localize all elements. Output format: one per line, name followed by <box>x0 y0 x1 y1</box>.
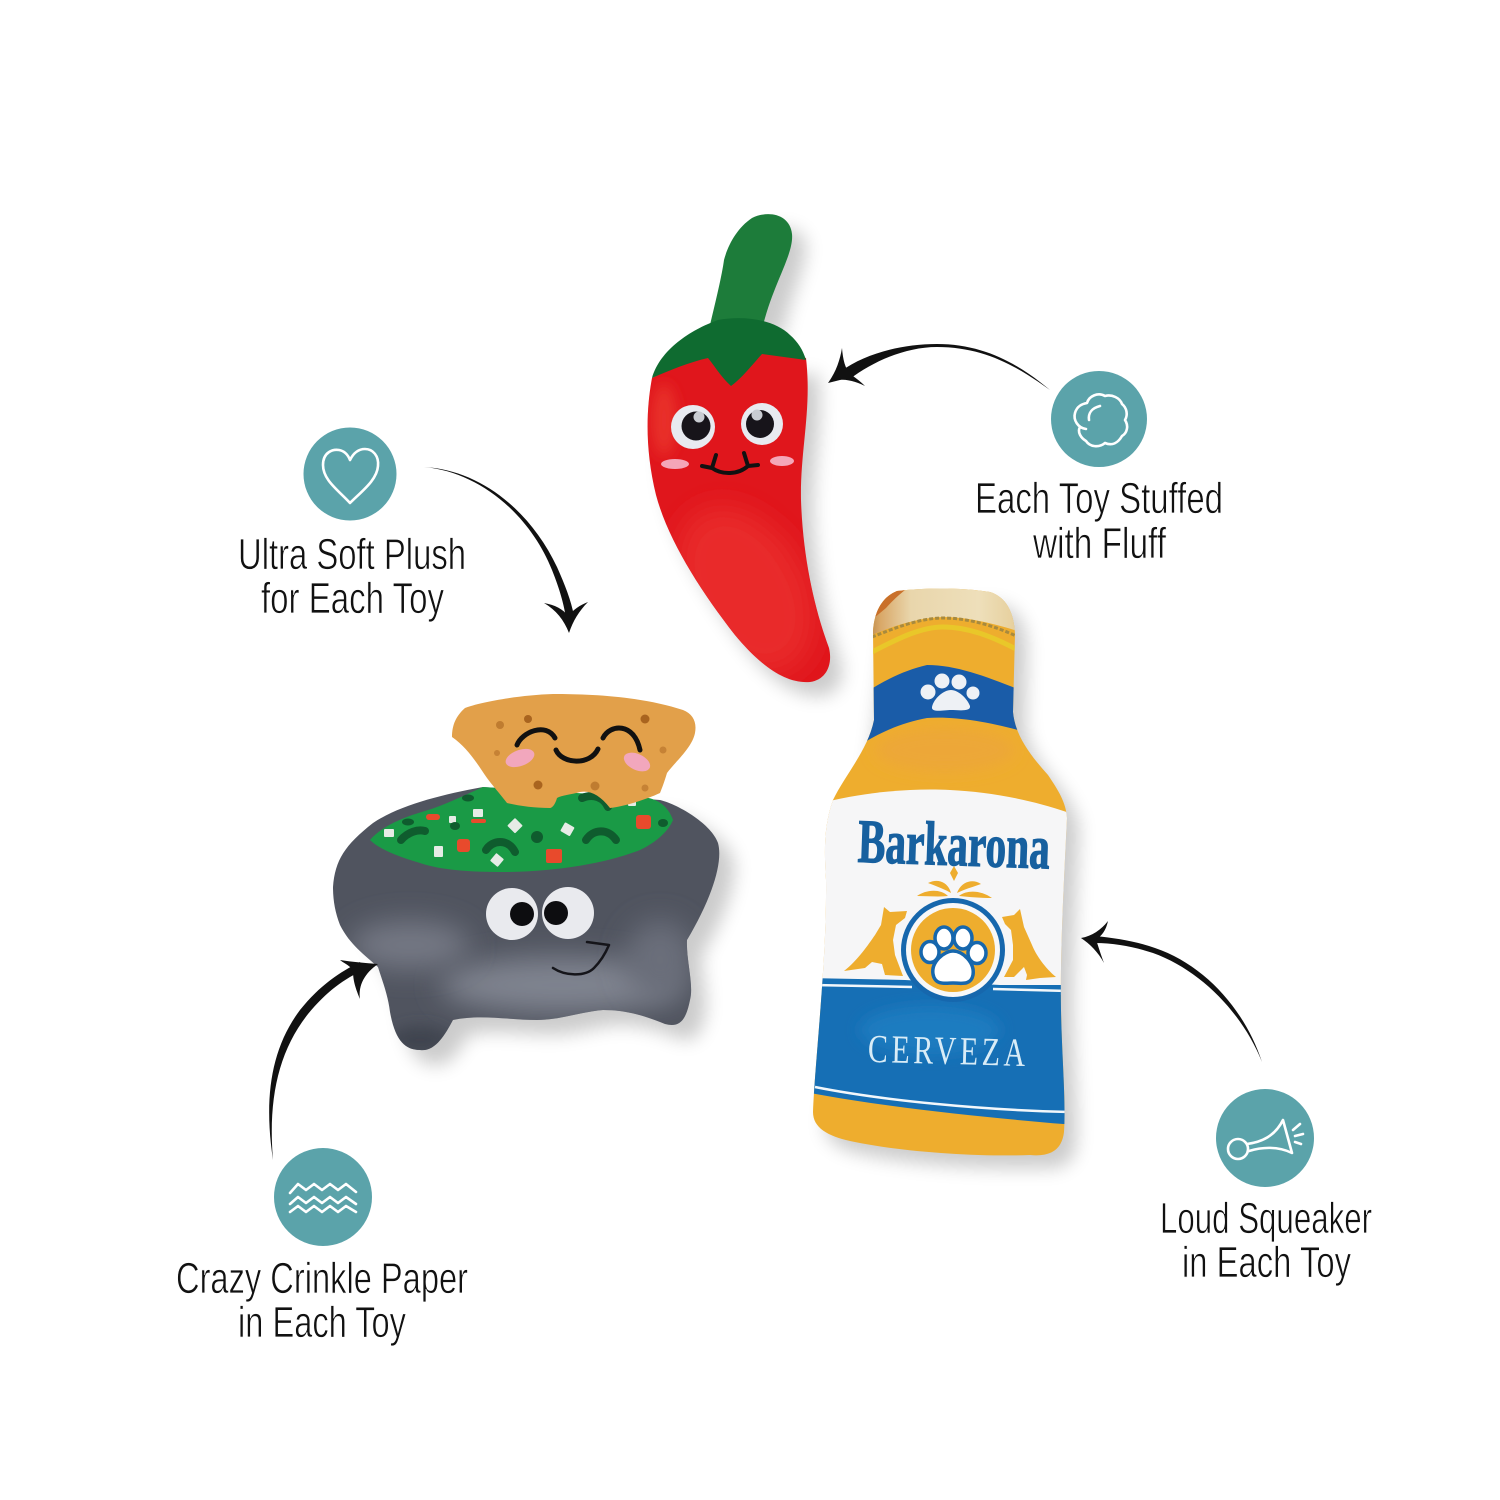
bottle gold cap <box>873 588 1014 634</box>
callout: ultra soft plush <box>238 428 466 623</box>
arrow: plush to guacamole <box>424 467 588 633</box>
chili right eye <box>741 403 783 445</box>
left dog silhouette <box>844 907 907 976</box>
chip specks <box>494 714 666 792</box>
icon: squeaker horn <box>1216 1089 1314 1187</box>
sun fan ornament <box>917 866 992 898</box>
chili smile <box>702 453 758 473</box>
chili body <box>648 354 830 682</box>
chip smile <box>556 749 598 761</box>
chili left eye <box>671 405 715 449</box>
chip right eye arc <box>603 728 640 750</box>
icon: crinkle waves <box>274 1148 372 1246</box>
label: squeaker <box>1160 1194 1372 1287</box>
arrow: fluff to chili <box>828 344 1050 390</box>
infographic canvas <box>178 214 1372 1346</box>
chili blushes <box>661 456 794 469</box>
chip left eye arc <box>517 730 555 745</box>
icon: heart <box>304 428 396 520</box>
bottle lower blue panel <box>810 978 1075 1125</box>
medallion paw <box>921 927 986 983</box>
arrow: crinkle to bowl <box>269 960 378 1160</box>
label: fluff <box>975 474 1223 568</box>
label: crinkle: Crazy Crinkle Paper <box>176 1254 468 1303</box>
label: plush: Ultra Soft Plush <box>238 530 466 579</box>
label: squeaker: Loud Squeaker <box>1160 1194 1372 1243</box>
bottle neck blue band <box>865 665 1025 742</box>
label: crinkle <box>176 1254 468 1347</box>
label: fluff: with Fluff <box>1032 519 1167 568</box>
brand name Barkarona: Barkarona <box>857 808 1051 882</box>
guacamole <box>370 787 673 872</box>
bowl right eye <box>542 887 594 939</box>
label: fluff: Each Toy Stuffed <box>975 474 1223 523</box>
toy: beer bottle <box>800 580 1080 1170</box>
medallion <box>901 898 1005 1002</box>
bowl left eye <box>486 888 538 940</box>
CERVEZA text: CERVEZA <box>867 1026 1030 1075</box>
callout: stuffed with fluff <box>975 371 1223 568</box>
toy: guacamole bowl with chip <box>320 694 734 1065</box>
callout: crinkle paper <box>176 1148 468 1347</box>
chip blushes <box>503 745 653 775</box>
tortilla chip <box>452 694 696 808</box>
bottle white stripes <box>815 985 1070 1112</box>
bowl smile <box>553 942 609 974</box>
label: plush: for Each Toy <box>261 574 444 623</box>
bowl body <box>333 787 720 1050</box>
toy: chili pepper <box>630 214 850 700</box>
icon: fluff cloud <box>1051 371 1147 467</box>
chili stem <box>710 214 792 330</box>
label: plush <box>238 530 466 623</box>
bottle white label <box>810 790 1075 995</box>
chili calyx <box>652 318 806 386</box>
callout: loud squeaker <box>1160 1089 1372 1287</box>
neck paw <box>920 674 980 711</box>
right dog silhouette <box>1002 909 1056 980</box>
label: squeaker: in Each Toy <box>1182 1238 1351 1287</box>
label: crinkle: in Each Toy <box>238 1298 406 1347</box>
guacamole toppings <box>384 794 668 867</box>
arrow: squeaker to bottle <box>1081 921 1262 1062</box>
bottle amber body <box>813 588 1067 1156</box>
bottle yellow seam <box>872 627 1018 652</box>
